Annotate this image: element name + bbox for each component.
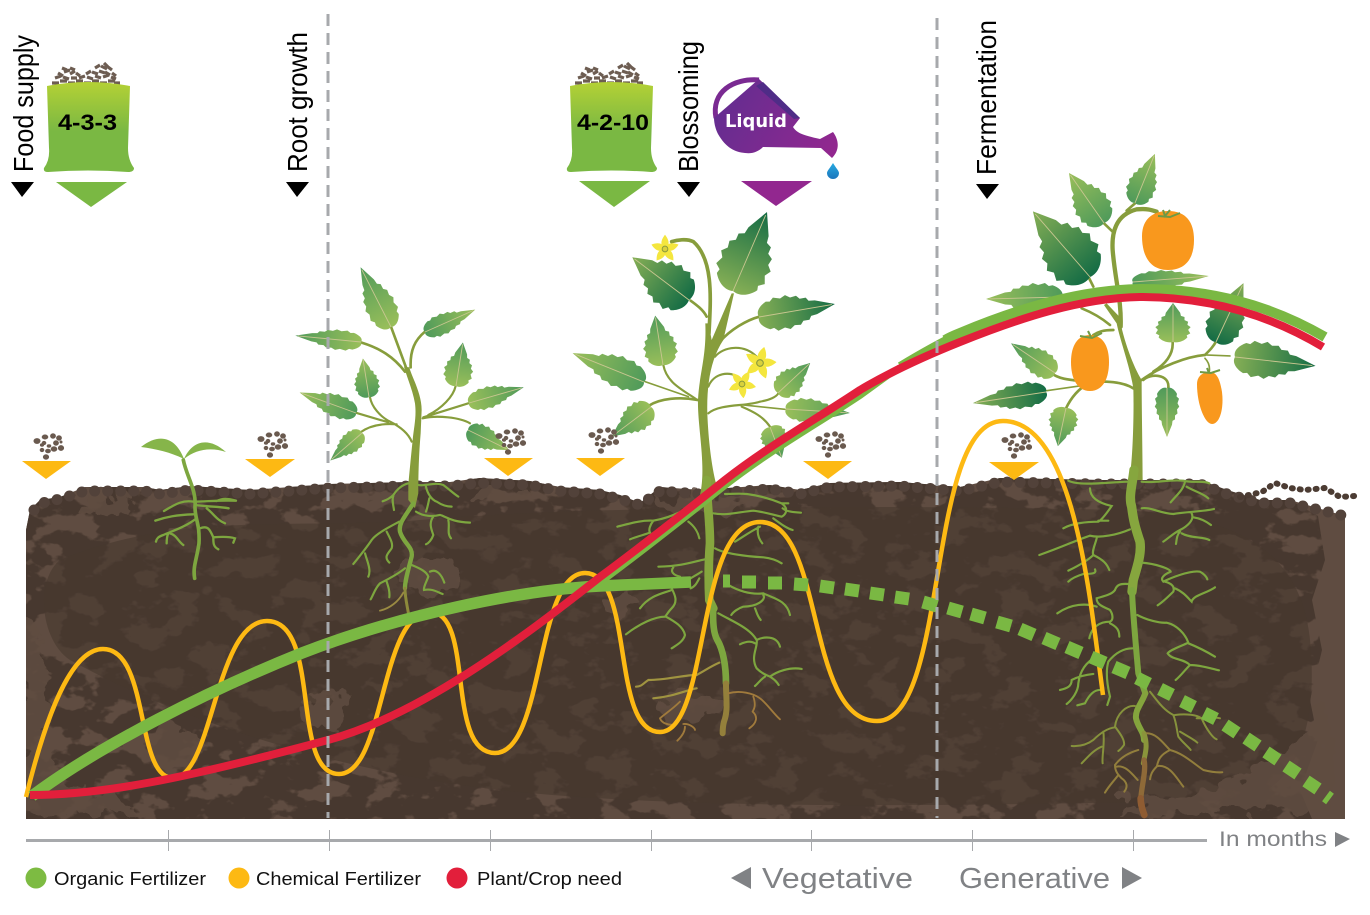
- soil right crumbs: [1240, 483, 1355, 497]
- second green down arrow: [579, 181, 650, 207]
- fertilizer bag 4-2-10: [567, 63, 657, 207]
- stage label: Fermentation: Fermentation: [971, 20, 1002, 175]
- plant 3: flowering plant: [567, 201, 851, 741]
- chart curves: [26, 289, 1330, 799]
- second bag label: 4-2-10: [577, 110, 649, 135]
- axis label: In months: [1219, 828, 1327, 851]
- can label: Liquid: [725, 111, 787, 132]
- young plant leaves: [294, 260, 527, 469]
- fertilizer bag 4-3-3: [44, 63, 134, 207]
- axis line: [26, 839, 1207, 842]
- legend: crop need: Plant/Crop need: [477, 869, 622, 889]
- chemical application marker 4: [576, 428, 625, 476]
- seedling cotyledon leaves: [141, 439, 226, 459]
- tomato fruit small: [1197, 368, 1223, 424]
- can body: [714, 79, 838, 158]
- stage label: Food supply: Food supply: [8, 35, 39, 172]
- tomato plant roots: [1039, 470, 1222, 815]
- axis ticks: [168, 830, 1134, 851]
- plant or crop need curve: [30, 297, 1323, 795]
- phase divider right: [936, 18, 938, 818]
- soil top crumbs: [34, 482, 1345, 516]
- second bag body: [567, 82, 657, 172]
- tomato plant leaves: [971, 148, 1318, 449]
- flower lower: [722, 364, 762, 403]
- soil dark texture: [26, 478, 1325, 819]
- tomato fruit middle: [1071, 331, 1109, 391]
- stage label: Root growth: Root growth: [282, 32, 313, 172]
- organic fertilizer curve, dashed decline: [723, 581, 1330, 799]
- soil dense dark mass: [44, 507, 1312, 805]
- legend: [26, 868, 622, 889]
- legend: chemical: Chemical Fertilizer: [256, 869, 421, 889]
- tomato fruit large: [1142, 210, 1194, 270]
- flowering plant roots: [617, 480, 802, 741]
- soil light patches: [20, 486, 1330, 812]
- time axis: [26, 828, 1350, 851]
- phase divider left: [326, 14, 330, 818]
- axis arrow: [1335, 832, 1350, 847]
- green down arrow: [56, 182, 127, 207]
- phase label: Generative: Generative: [959, 863, 1110, 895]
- purple down arrow: [741, 181, 812, 206]
- flower top: [650, 235, 680, 263]
- bag body: [44, 82, 134, 172]
- chemical fertilizer curve: [26, 421, 1103, 797]
- young plant stems: [356, 327, 470, 508]
- legend: crop need: [446, 868, 622, 889]
- chemical application marker 1: [22, 434, 71, 479]
- soil panel: [20, 478, 1355, 819]
- green follow curve transition: [900, 333, 960, 366]
- green follow curve upper: [945, 289, 1325, 340]
- plant 1: seedling: [141, 439, 236, 578]
- seedling stem and roots: [155, 460, 236, 578]
- pellets on second bag: [575, 63, 643, 83]
- bag label: 4-3-3: [58, 110, 117, 135]
- green follow curve lower: [600, 367, 900, 583]
- can handle: [715, 80, 759, 118]
- icon: liquid watering can: [714, 79, 839, 206]
- chemical application marker 6: [989, 433, 1039, 480]
- chemical application marker 5: [803, 432, 852, 479]
- pellets on bag: [52, 63, 120, 83]
- plant 2: young plant: [294, 260, 527, 613]
- young plant roots: [353, 483, 470, 613]
- organic fertilizer curve, rising: [32, 582, 691, 796]
- plant 4: fruiting tomato plant: [971, 148, 1318, 815]
- water drop: [827, 163, 839, 179]
- chemical application marker 2: [245, 432, 295, 477]
- flowering plant stems: [645, 240, 785, 495]
- chemical application marker 3: [484, 429, 533, 476]
- flower middle: [740, 343, 781, 383]
- soil base layer: [26, 478, 1345, 819]
- legend: organic: Organic Fertilizer: [54, 869, 206, 889]
- tomato plant stems: [1047, 203, 1230, 480]
- phase label: Vegetative: Vegetative: [762, 863, 913, 895]
- flowering plant leaves: [567, 201, 851, 463]
- stage label: Blossoming: Blossoming: [673, 41, 704, 172]
- can top fold: [756, 82, 800, 119]
